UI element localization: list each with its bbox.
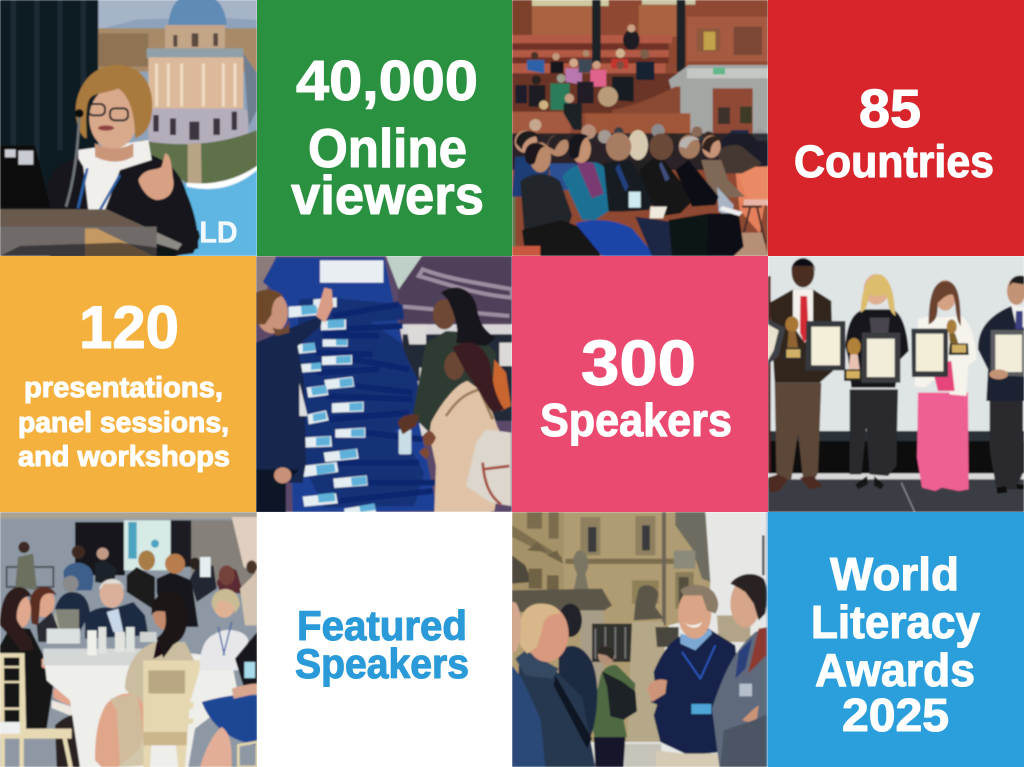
panel: World Literacy Awards 2025 xyxy=(768,512,1024,767)
stat label: and workshops xyxy=(18,441,230,473)
photo: audience in theatre xyxy=(512,0,768,256)
stat label: Online xyxy=(308,117,467,179)
panel: World Literacy Awards 2025: Literacy xyxy=(811,596,980,648)
stat number: 300 xyxy=(581,327,696,399)
panel: World Literacy Awards 2025: Awards xyxy=(815,644,975,696)
photo: delegates at lanyard table xyxy=(256,256,512,512)
stat label: viewers xyxy=(291,164,484,226)
stat label xyxy=(291,117,484,226)
photo: speaker at lectern: LD xyxy=(199,216,238,250)
panel: 300 speakers xyxy=(512,256,768,512)
stat label: panel sessions, xyxy=(18,407,229,439)
stat label xyxy=(18,372,230,473)
stat label: presentations, xyxy=(24,372,223,404)
panel: 40,000 online viewers xyxy=(257,0,512,256)
panel: 120 presentations, panel sessions and workshops xyxy=(0,256,256,512)
photo: gala dinner table xyxy=(0,512,257,767)
stat label: Countries xyxy=(794,136,994,187)
panel: World Literacy Awards 2025: 2025 xyxy=(842,689,949,741)
stat number: 120 xyxy=(79,294,179,361)
stat label: Speakers xyxy=(540,394,732,446)
panel: featured speakers heading: Featured xyxy=(297,602,467,649)
stat number: 85 xyxy=(859,79,921,139)
photo: award winners on stage xyxy=(768,256,1024,512)
panel: featured speakers heading: Speakers xyxy=(295,640,469,687)
photo: speaker at lectern xyxy=(0,0,257,256)
panel: World Literacy Awards 2025: World xyxy=(830,548,959,600)
stat number: 40,000 xyxy=(296,49,478,113)
panel: 85 countries xyxy=(768,0,1024,256)
panel: featured speakers heading xyxy=(257,512,512,767)
photo: delegates outside Oxford college xyxy=(512,512,768,767)
